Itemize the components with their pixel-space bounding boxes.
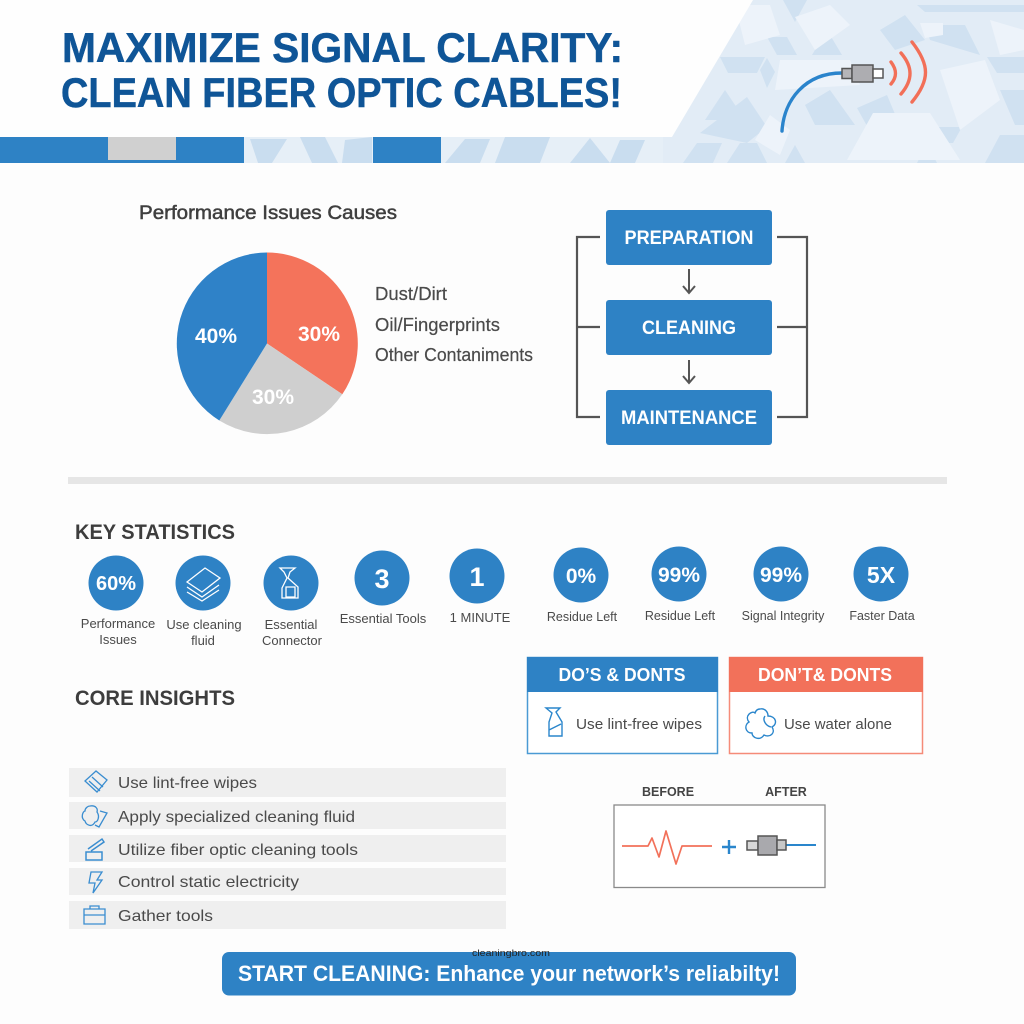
panel: before after diagram [614,805,825,888]
insight row: lint-free wipes [69,768,506,797]
panel: do's: DO’S & DONTS [558,665,686,685]
stat: cleaning fluid: Use cleaning [166,617,242,632]
stat: 99%: Residue Left [645,609,716,623]
pie chart: 30% [298,323,340,346]
stat: 99% signal: Signal Integrity [742,609,825,623]
pie legend: Other Contaniments [375,345,533,365]
before and after labels: BEFORE [642,785,694,799]
insight row: gather tools: Gather tools [118,908,213,925]
watermark: cleaningbro.com [472,948,550,959]
arrow [683,360,695,383]
stat: 5X: 5X [867,562,896,588]
before and after labels [642,785,807,799]
title [61,24,623,116]
stat: 1 [450,548,511,625]
arrow [683,269,695,293]
header background pattern [0,0,1024,163]
stat: 99% signal: 99% [760,564,802,587]
stat: 99% [645,546,716,623]
pie legend: Dust/Dirt [375,284,447,304]
call to action banner: START CLEANING: Enhance your network’s reliabilty! [238,961,780,986]
call to action banner [222,952,796,996]
icon: cloth [746,709,775,738]
title: CLEAN FIBER OPTIC CABLES! [61,69,622,116]
pie chart [177,252,358,434]
stat: 0%: 0% [566,565,596,588]
process step: preparation: PREPARATION [624,228,754,249]
stat: 3: Essential Tools [340,611,427,626]
insight row: static electricity: Control static electricity [118,874,299,891]
insight row: gather tools [69,901,506,929]
insight row: cleaning tools: Utilize fiber optic cleaning tools [118,842,358,859]
stat: essential connector: Essential [265,617,317,632]
pie legend: Oil/Fingerprints [375,315,500,335]
insight row: lint-free wipes: Use lint-free wipes [118,775,257,792]
stat: 0% [547,548,618,624]
stat: 60% [81,556,155,647]
stat: 3: 3 [374,564,390,594]
process step: cleaning [606,300,772,355]
white title area [0,0,753,137]
panel: do's [527,657,718,754]
stat: 5X [849,546,915,623]
panel: don'ts: Use water alone [784,716,892,733]
insight row: static electricity [69,868,506,895]
stat: 99% signal [742,546,825,623]
panel: don'ts: DON’T& DONTS [758,665,892,685]
insight row: cleaning fluid [69,802,506,829]
insight row: cleaning fluid: Apply specialized cleaning fluid [118,809,355,826]
stat: 60%: Issues [99,632,137,647]
header color band [0,137,441,163]
icon: fiber connector with signal [782,42,926,131]
stat: 3 [340,550,427,626]
stat: 60%: 60% [96,573,136,595]
stat: 60%: Performance [81,616,155,631]
panel: don'ts [729,657,923,754]
process step: preparation [606,210,772,265]
stat: cleaning fluid [166,556,242,648]
pie legend [375,284,533,365]
process flow brackets [577,237,807,417]
pie chart: 30% [252,386,294,409]
stat: cleaning fluid: fluid [191,633,215,648]
pie chart: 40% [195,325,237,348]
insight row: cleaning tools [69,835,506,862]
stat: 5X: Faster Data [849,609,915,623]
pie chart heading: Performance Issues Causes [139,202,397,224]
title: MAXIMIZE SIGNAL CLARITY: [62,24,623,71]
process step: cleaning: CLEANING [642,318,736,339]
before and after labels: AFTER [765,785,807,799]
stat: 1: 1 MINUTE [450,610,511,625]
process step: maintenance [606,390,772,445]
stat: 1: 1 [469,562,485,592]
section divider [68,477,947,484]
stat: essential connector: Connector [262,633,323,648]
icon: spray bottle [546,708,562,736]
stat: 99%: 99% [658,564,700,587]
panel: do's: Use lint-free wipes [576,716,702,733]
heading: core insights: CORE INSIGHTS [75,687,235,710]
stat: essential connector [262,556,323,648]
stat: 0%: Residue Left [547,610,618,624]
heading: key statistics: KEY STATISTICS [75,521,235,544]
process step: maintenance: MAINTENANCE [621,408,757,429]
